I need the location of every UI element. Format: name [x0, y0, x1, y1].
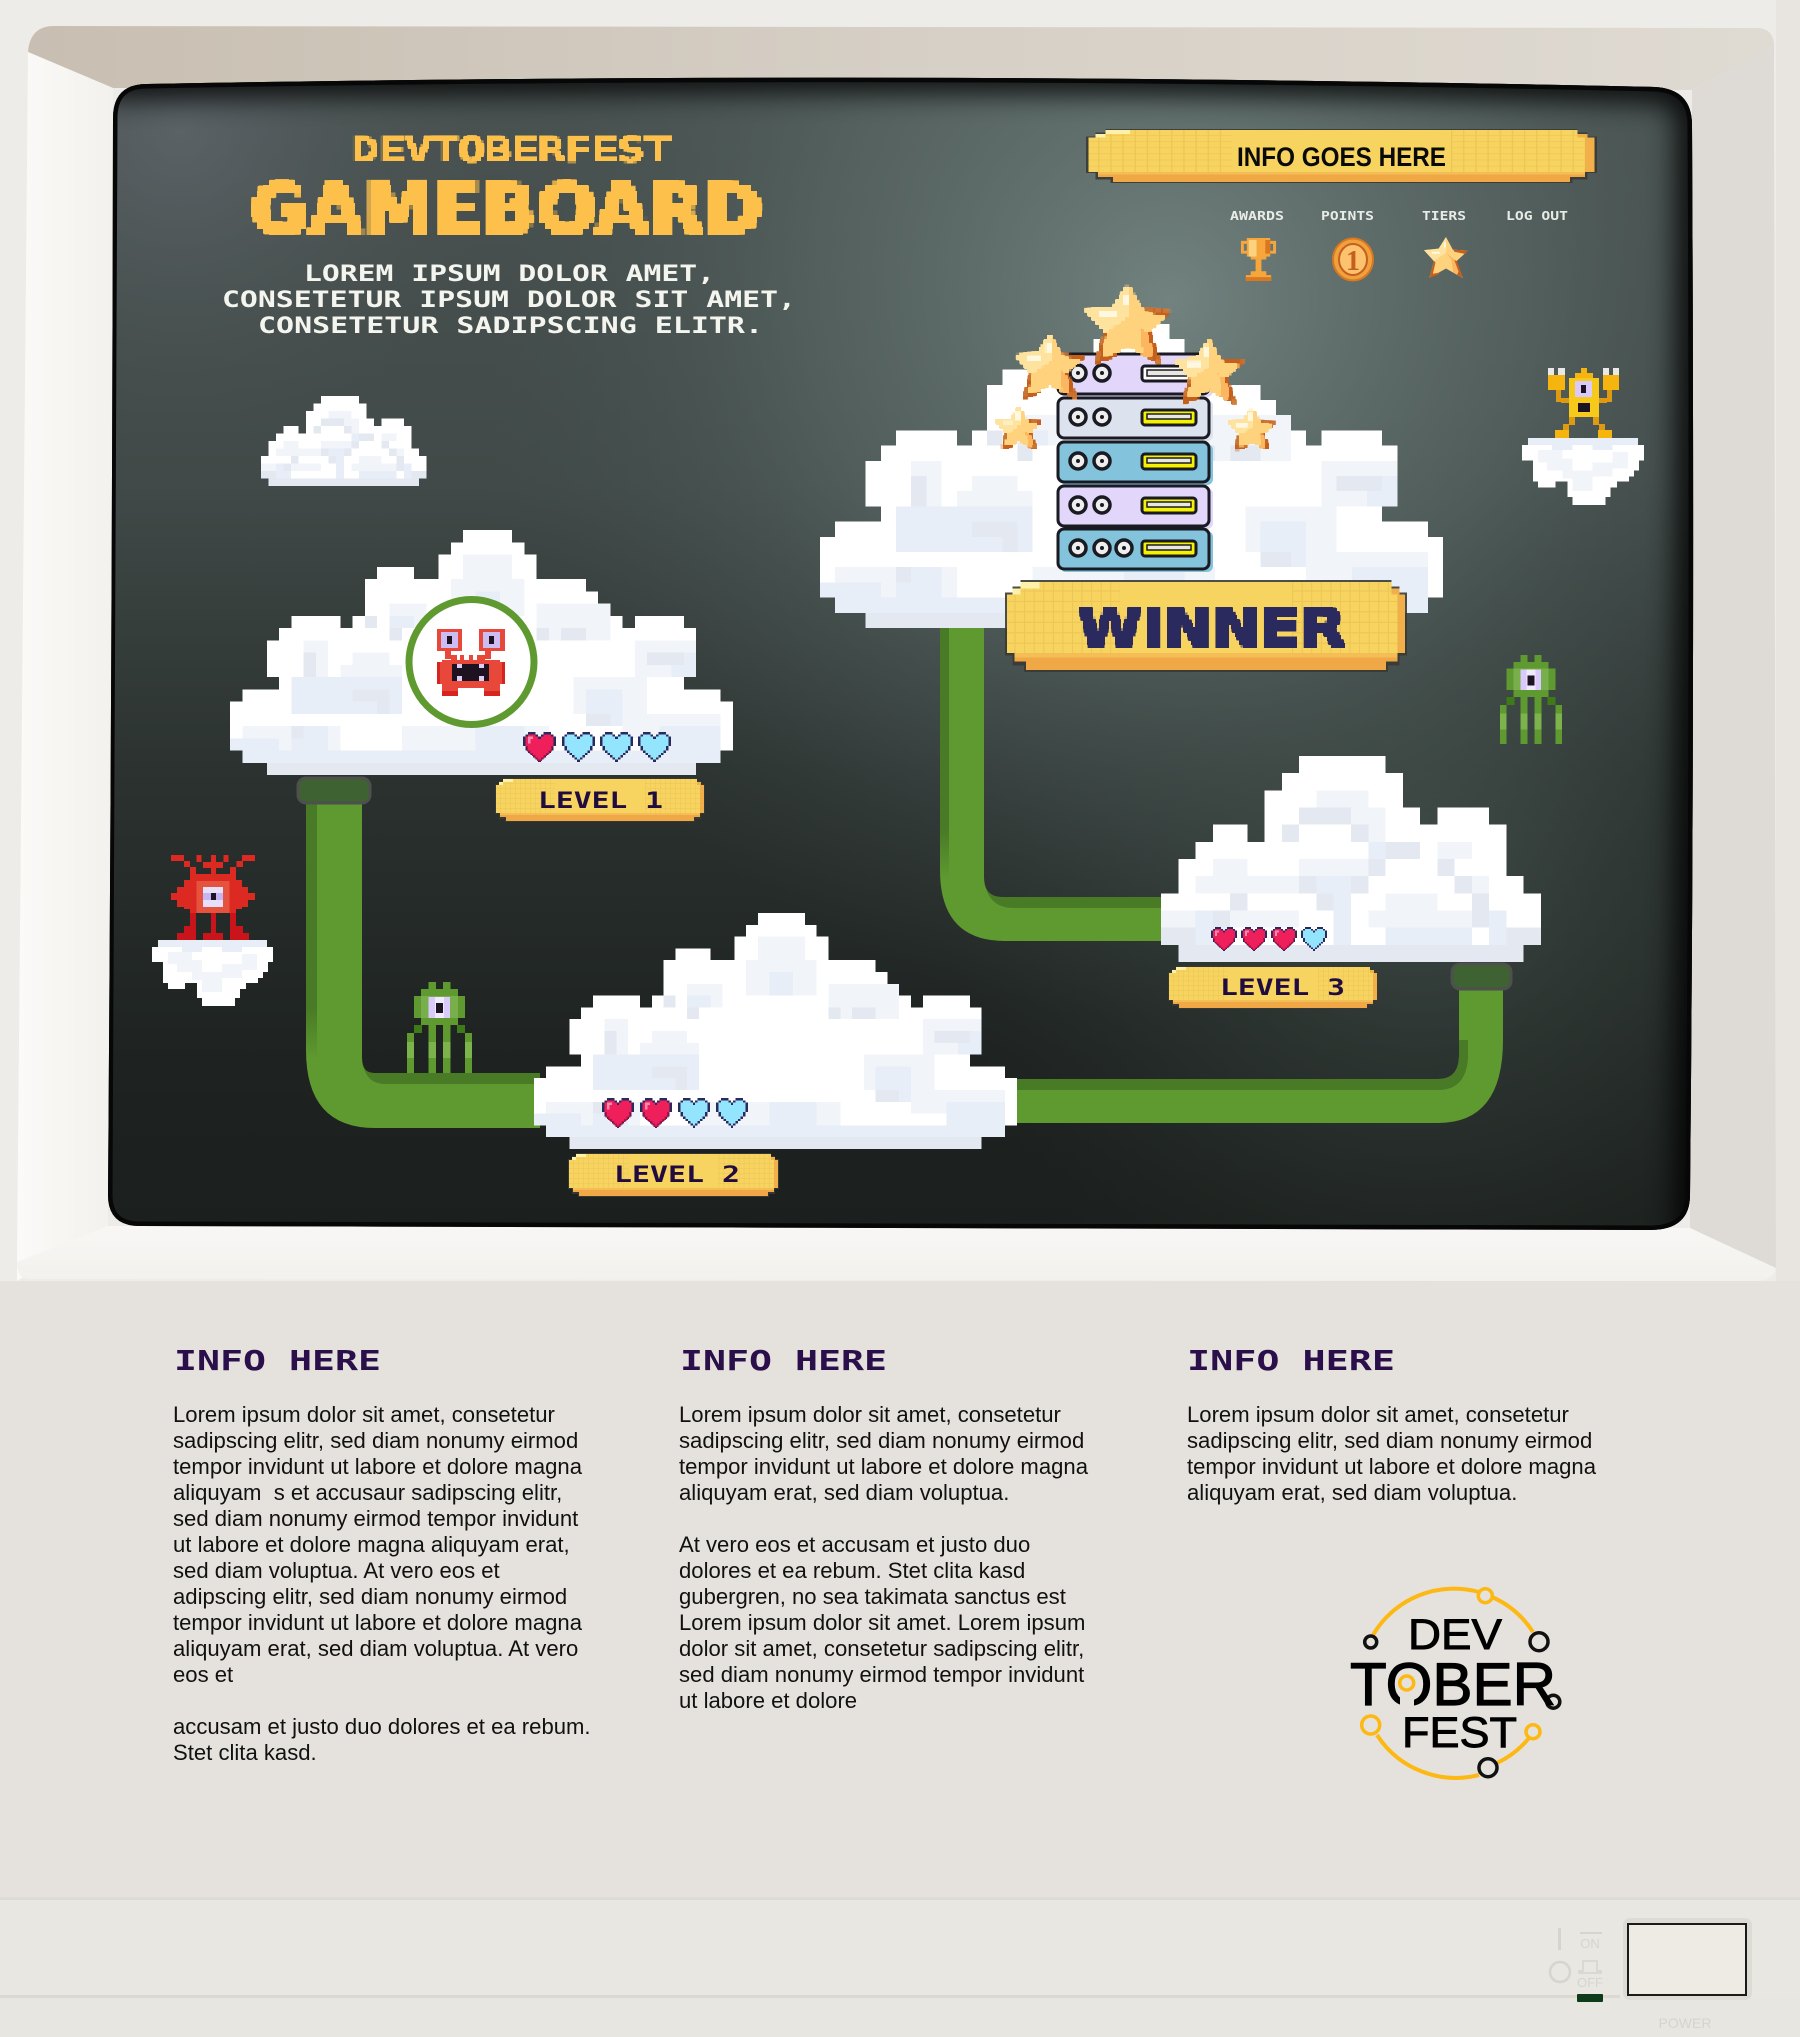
devtoberfest logo: DEV [1408, 1611, 1502, 1659]
level 1 hearts [523, 732, 671, 762]
monitor bezel bevels [17, 26, 1776, 1281]
level 3 hearts [1211, 927, 1327, 951]
power labels and indicator: POWER [1659, 2015, 1711, 2031]
server unit 1 [1058, 354, 1213, 397]
green squid monster right [1500, 655, 1562, 744]
level 2 cloud [534, 913, 1017, 1149]
devtoberfest logo: FEST [1402, 1709, 1517, 1757]
column 2 text: sed diam nonumy eirmod tempor invidunt [679, 1662, 1084, 1687]
column 1 text: Lorem ipsum dolor sit amet, consetetur [173, 1402, 555, 1427]
column 2 text: Lorem ipsum dolor sit amet, consetetur [679, 1402, 1061, 1427]
level 1 badge: LEVEL 1 [538, 789, 663, 814]
level 2 badge: LEVEL 2 [614, 1163, 740, 1188]
server unit 4 [1058, 486, 1213, 529]
nav labels: LOG OUT [1506, 208, 1568, 223]
nav labels [1230, 208, 1568, 223]
pipe: level 2 to level 3 [1010, 964, 1511, 1123]
column 1 text: sadipscing elitr, sed diam nonumy eirmod [173, 1428, 578, 1453]
column 1 text: tempor invidunt ut labore et dolore magna [173, 1454, 582, 1479]
devtoberfest logo: TOBER [1350, 1651, 1556, 1718]
level 3 cloud [1161, 756, 1541, 962]
column 1 text: Stet clita kasd. [173, 1740, 317, 1765]
power switch [1623, 1918, 1752, 2000]
pipe: level 1 to level 2 [298, 778, 540, 1128]
subtitle text: LOREM IPSUM DOLOR AMET, [304, 261, 715, 287]
server unit 3 [1058, 442, 1213, 485]
level 3 badge: LEVEL 3 [1220, 976, 1345, 1001]
column 1 text: ut labore et dolore magna aliquyam erat, [173, 1532, 570, 1557]
server unit 2 [1058, 398, 1213, 441]
column 3 text [1187, 1402, 1596, 1505]
nav labels: AWARDS [1230, 208, 1284, 223]
column headings [174, 1344, 1395, 1377]
column 3 text: sadipscing elitr, sed diam nonumy eirmod [1187, 1428, 1592, 1453]
info goes here badge: INFO GOES HERE [1237, 142, 1446, 172]
power labels and indicator: OFF [1577, 1975, 1603, 1990]
winner badge [1005, 580, 1407, 676]
column 2 text: At vero eos et accusam et justo duo [679, 1532, 1030, 1557]
column 2 text: dolores et ea rebum. Stet clita kasd [679, 1558, 1025, 1583]
level 1 cloud [230, 530, 733, 775]
column 3 text: Lorem ipsum dolor sit amet, consetetur [1187, 1402, 1569, 1427]
server unit 5 [1058, 529, 1213, 572]
subtitle text [222, 261, 796, 339]
server rack [1058, 354, 1213, 572]
yellow monster on floating cloud [1522, 368, 1644, 505]
icon: coin [1333, 238, 1373, 280]
level 3 badge [1168, 966, 1378, 1011]
winner badge: WINNER [1078, 598, 1345, 659]
column 3 text: tempor invidunt ut labore et dolore magna [1187, 1454, 1596, 1479]
column 2 text: dolor sit amet, consetetur sadipscing elitr, [679, 1636, 1084, 1661]
level 2 badge [568, 1153, 779, 1199]
monitor base panel [0, 1897, 1800, 2037]
column 1 text: adipscing elitr, sed diam nonumy eirmod [173, 1584, 567, 1609]
nav labels: POINTS [1321, 208, 1374, 223]
column 2 text: tempor invidunt ut labore et dolore magna [679, 1454, 1088, 1479]
green squid monster on pipe [407, 982, 472, 1073]
small decorative cloud [261, 396, 426, 486]
column 1 text: aliquyam erat, sed diam voluptua. At vero [173, 1636, 578, 1661]
subtitle text: CONSETETUR IPSUM DOLOR SIT AMET, [222, 287, 796, 313]
winner stars [997, 285, 1274, 450]
column 1 text: eos et [173, 1662, 233, 1687]
column headings: INFO HERE [174, 1344, 381, 1377]
title: devtoberfest: DEVTOBERFEST [352, 131, 671, 169]
red monster on floating cloud [152, 855, 273, 1006]
avatar ring with red monster [409, 600, 534, 724]
title: gameboard: GAMEBOARD [250, 170, 763, 250]
column 1 text: tempor invidunt ut labore et dolore magna [173, 1610, 582, 1635]
column 2 text: aliquyam erat, sed diam voluptua. [679, 1480, 1009, 1505]
power labels and indicator [1550, 1928, 1711, 2031]
icon: coin: 1 [1346, 246, 1360, 277]
crt screen [100, 60, 1710, 1240]
icon: star [1424, 237, 1468, 278]
column 2 text: gubergren, no sea takimata sanctus est [679, 1584, 1066, 1609]
column headings: INFO HERE [680, 1344, 887, 1377]
column 1 text: sed diam voluptua. At vero eos et [173, 1558, 500, 1583]
column 2 text: ut labore et dolore [679, 1688, 857, 1713]
column 2 text: Lorem ipsum dolor sit amet. Lorem ipsum [679, 1610, 1085, 1635]
column 1 text: accusam et justo duo dolores et ea rebum. [173, 1714, 591, 1739]
column 1 text: sed diam nonumy eirmod tempor invidunt [173, 1506, 578, 1531]
level 2 hearts [602, 1098, 748, 1128]
column 1 text: aliquyam s et accusaur sadipscing elitr, [173, 1480, 562, 1505]
pipe: winner to level 3 [940, 620, 1170, 941]
column headings: INFO HERE [1187, 1344, 1395, 1377]
winner cloud [820, 324, 1443, 628]
info goes here badge [1086, 129, 1597, 185]
column 3 text: aliquyam erat, sed diam voluptua. [1187, 1480, 1517, 1505]
column 2 text [679, 1402, 1088, 1713]
icon: trophy [1241, 238, 1276, 281]
column 1 text [173, 1402, 591, 1765]
subtitle text: CONSETETUR SADIPSCING ELITR. [258, 313, 763, 339]
column 2 text: sadipscing elitr, sed diam nonumy eirmod [679, 1428, 1084, 1453]
power labels and indicator: ON [1580, 1936, 1600, 1951]
devtoberfest logo [1350, 1589, 1560, 1778]
level 1 badge [495, 778, 705, 824]
nav labels: TIERS [1422, 208, 1466, 223]
